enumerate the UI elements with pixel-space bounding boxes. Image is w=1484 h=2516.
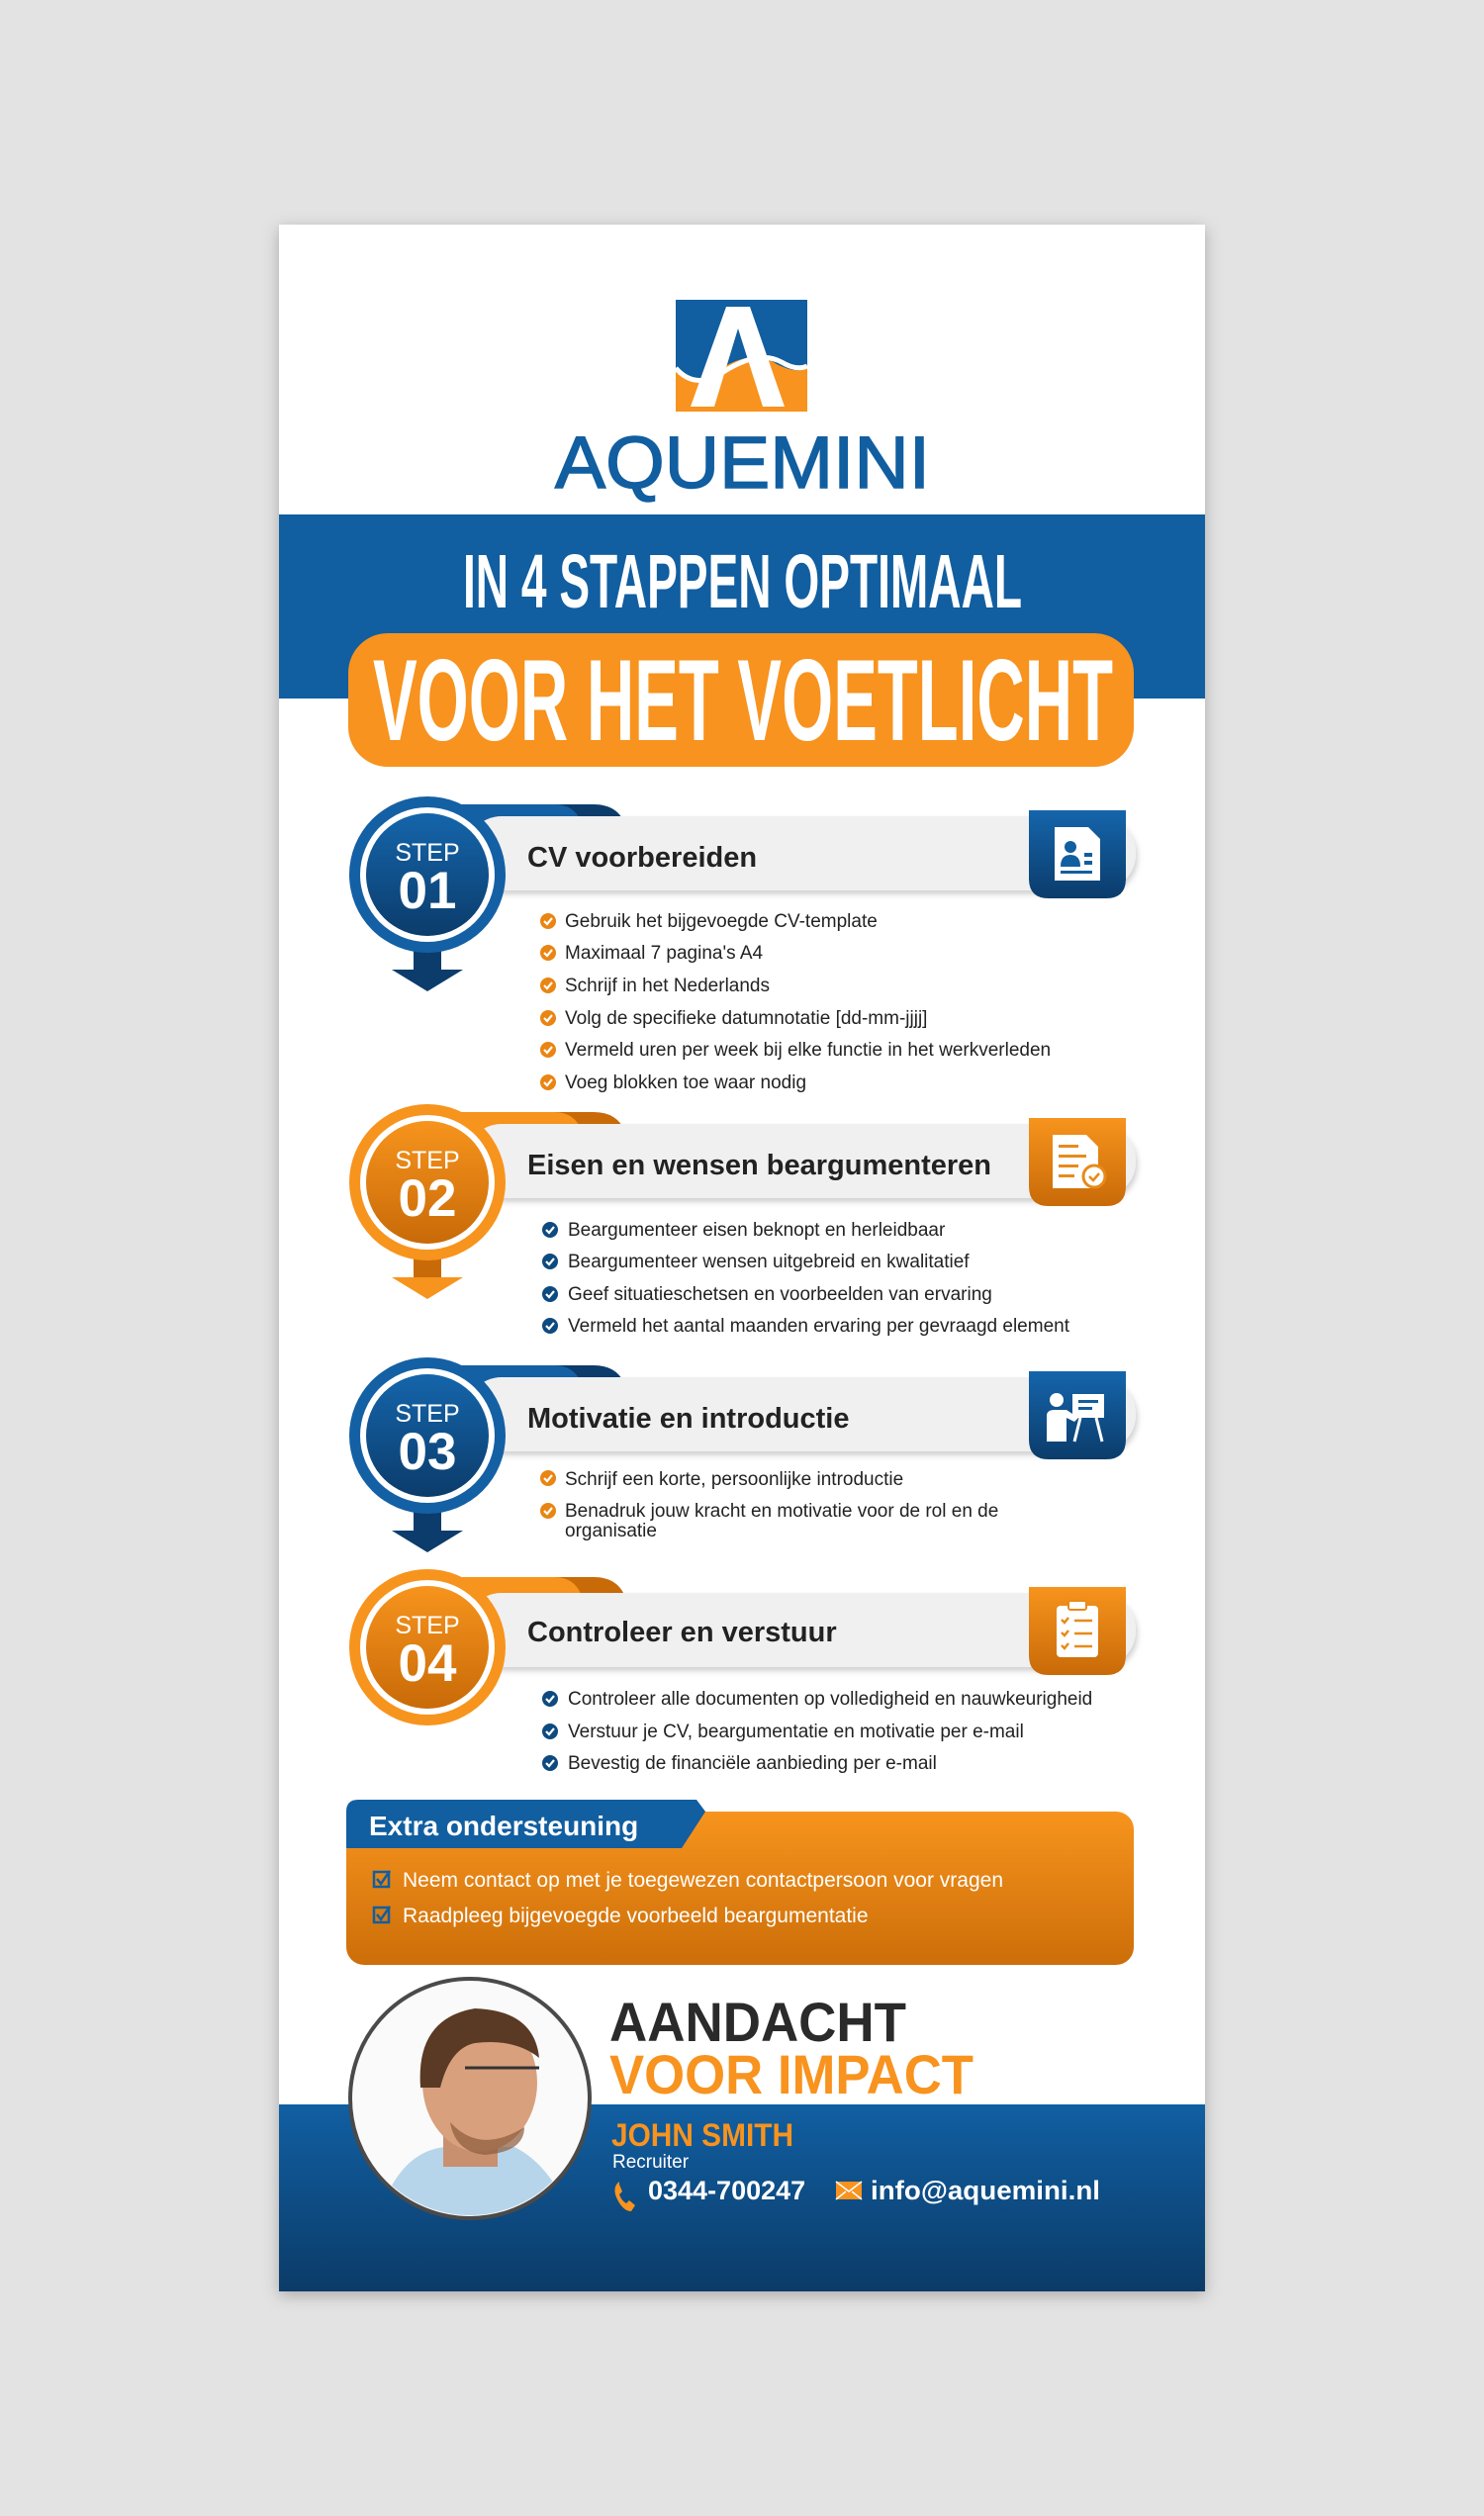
step 2: STEP: [395, 1147, 460, 1174]
step 3: 03: [399, 1423, 456, 1481]
footer band: [279, 2104, 1205, 2291]
step 1: STEP: [395, 839, 460, 867]
step 4 bullets: Bevestig de financiële aanbieding per e-mail: [568, 1753, 937, 1774]
step 4: STEP: [395, 1612, 460, 1639]
icon: presenter: [1029, 1371, 1126, 1459]
step 4 bullets: Verstuur je CV, beargumentatie en motivatie per e-mail: [568, 1722, 1024, 1742]
card: [279, 225, 1205, 2291]
step 4 bullets: Controleer alle documenten op volledigheid en nauwkeurigheid: [568, 1689, 1092, 1710]
contact info: Recruiter: [612, 2152, 690, 2173]
icon: phone: [614, 2182, 635, 2211]
contact info: 0344-700247: [648, 2176, 805, 2205]
step 4 title: Controleer en verstuur: [527, 1617, 837, 1648]
icon: cv document: [1029, 810, 1126, 898]
contact info: info@aquemini.nl: [871, 2176, 1100, 2205]
icon: checked document: [1029, 1118, 1126, 1206]
step 3: STEP: [395, 1400, 460, 1428]
step 3 bullets: Schrijf een korte, persoonlijke introductie: [565, 1469, 903, 1490]
step 2 bullets: Beargumenteer eisen beknopt en herleidbaar: [568, 1220, 946, 1241]
step 4: 04: [399, 1634, 457, 1693]
photo: [350, 1979, 590, 2226]
headline: aandacht voor impact: AANDACHT: [609, 1991, 906, 2053]
panel: extra ondersteuning: Raadpleeg bijgevoegde voorbeeld beargumentatie: [403, 1905, 869, 1927]
icon: checklist clipboard: [1029, 1587, 1126, 1675]
title pill: [348, 633, 1134, 767]
step 1: 01: [399, 862, 456, 920]
step 1 bullets: Vermeld uren per week bij elke functie in het werkverleden: [565, 1040, 1051, 1061]
step 1: [349, 796, 1136, 1093]
step 2 bullets: Geef situatieschetsen en voorbeelden van ervaring: [568, 1284, 992, 1305]
step 3 bullets: organisatie: [565, 1521, 657, 1541]
contact info: [611, 2117, 1100, 2211]
subtitle: IN 4 STAPPEN OPTIMAAL: [463, 539, 1022, 624]
step 1 bullets: Maximaal 7 pagina's A4: [565, 943, 764, 964]
panel: extra ondersteuning: Extra ondersteuning: [369, 1811, 638, 1841]
step 1 bullets: Schrijf in het Nederlands: [565, 976, 770, 996]
panel: extra ondersteuning: [346, 1800, 1134, 1965]
step 1 bullets: [540, 911, 1051, 1093]
step 2 bullets: Beargumenteer wensen uitgebreid en kwalitatief: [568, 1252, 970, 1272]
step 3: [349, 1357, 1136, 1552]
step 4: [349, 1569, 1136, 1774]
step 1 bullets: Voeg blokken toe waar nodig: [565, 1072, 806, 1093]
contact info: JOHN SMITH: [611, 2117, 793, 2153]
step 2 bullets: [542, 1220, 1070, 1337]
step 4 bullets: [542, 1689, 1092, 1774]
step 3 bullets: Benadruk jouw kracht en motivatie voor de rol en de: [565, 1501, 998, 1522]
logo text: AQUEMINI: [555, 421, 930, 504]
step 2: [349, 1104, 1136, 1337]
icon: mail: [836, 2182, 862, 2199]
headline: aandacht voor impact: VOOR IMPACT: [609, 2043, 974, 2105]
step 1 title: CV voorbereiden: [527, 842, 757, 874]
logo: [555, 300, 930, 504]
step 1 bullets: Gebruik het bijgevoegde CV-template: [565, 911, 878, 932]
step 3 bullets: [540, 1469, 998, 1541]
step 2 bullets: Vermeld het aantal maanden ervaring per gevraagd element: [568, 1316, 1070, 1337]
panel: extra ondersteuning: Neem contact op met je toegewezen contactpersoon voor vragen: [403, 1869, 1003, 1892]
step 1 bullets: Volg de specifieke datumnotatie [dd-mm-jjjj]: [565, 1008, 927, 1029]
step 2 title: Eisen en wensen beargumenteren: [527, 1150, 991, 1181]
step 3 title: Motivatie en introductie: [527, 1403, 849, 1435]
step 2: 02: [399, 1169, 456, 1228]
blue header band: [279, 514, 1205, 699]
headline: aandacht voor impact: [609, 1991, 974, 2105]
icon: logo mark: [676, 300, 807, 412]
